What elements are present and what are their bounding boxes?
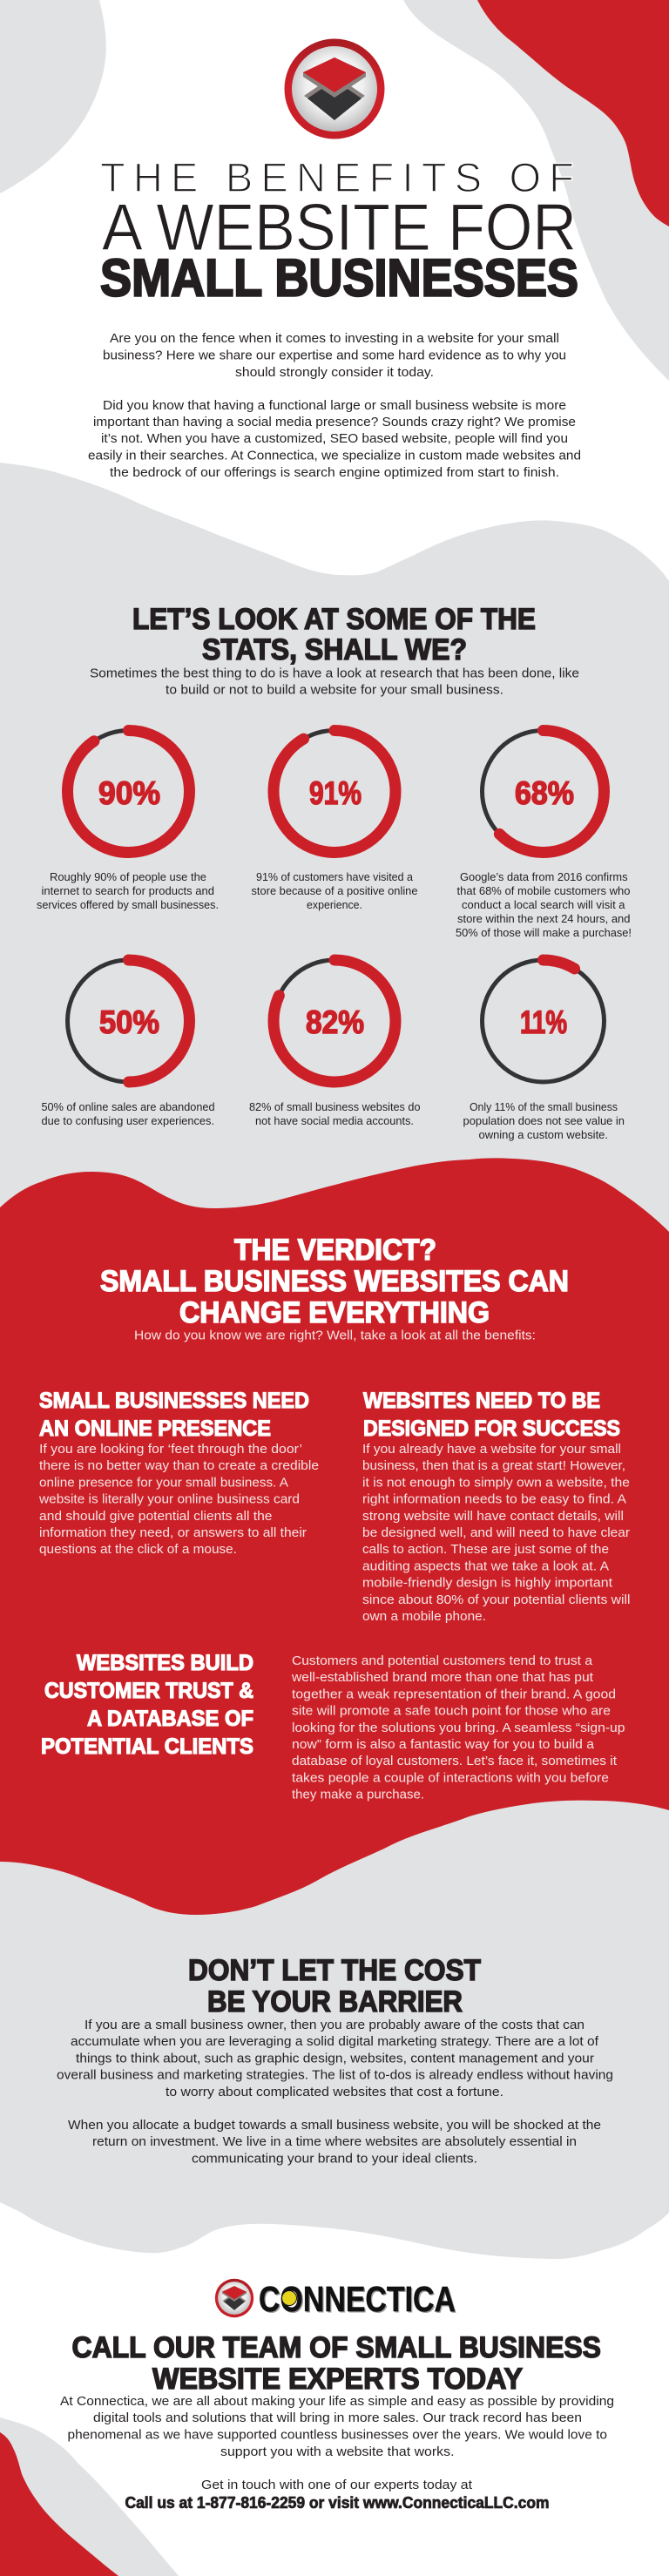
benefit heading: customer trust: A DATABASE OF [87, 1707, 253, 1731]
stat: 68%: that 68% of mobile customers who [456, 885, 631, 897]
heading: call to action [71, 2331, 601, 2396]
cost barrier text: accumulate when you are leveraging a solid digital marketing strategy. There are a lot of [71, 2034, 599, 2049]
cost barrier text: return on investment. We live in a time where websites are absolutely essential in [92, 2134, 577, 2149]
intro text: important than having a social media presence? Sounds crazy right? We promise [93, 415, 576, 429]
stat: 90%: Roughly 90% of people use the [50, 871, 206, 883]
intro text: Did you know that having a functional large or small business website is more [103, 398, 566, 413]
stats intro text: to build or not to build a website for your small business. [166, 683, 503, 698]
benefit: designed for success: If you already have a website for your small [362, 1442, 621, 1457]
stat: 68%: 50% of those will make a purchase! [456, 927, 632, 939]
call to action text: Get in touch with one of our experts today at [201, 2478, 473, 2492]
stat: 50%: due to confusing user experiences. [42, 1115, 214, 1127]
stat: 11%: 11% [520, 1004, 567, 1040]
stat: 50%: 50% [99, 1004, 159, 1040]
heading: verdict [100, 1234, 569, 1329]
cost barrier text: communicating your brand to your ideal clients. [192, 2151, 477, 2166]
benefit text: customer trust: Customers and potential customers tend to trust a [292, 1653, 593, 1668]
stat: 68%: Google’s data from 2016 confirms [460, 871, 627, 883]
benefit: online presence: website is literally your online business card [38, 1492, 300, 1507]
cost barrier text [57, 2018, 613, 2166]
call to action text: digital tools and solutions that will bring in more sales. Our track record has been [93, 2410, 582, 2425]
heading: stats [132, 603, 536, 666]
cost barrier text: If you are a small business owner, then you are probably aware of the costs that can [84, 2018, 585, 2032]
stat: 11%: population does not see value in [463, 1115, 625, 1127]
stat: 11%: owning a custom website. [479, 1129, 608, 1141]
stat: 91%: 91% of customers have visited a [256, 871, 413, 883]
benefit text: customer trust: database of loyal customers. Let’s face it, sometimes it [292, 1754, 618, 1768]
benefit: online presence: questions at the click of a mouse. [39, 1542, 237, 1557]
heading: cost barrier: BE YOUR BARRIER [207, 1985, 463, 2018]
heading: verdict: SMALL BUSINESS WEBSITES CAN [100, 1265, 569, 1298]
stat: 91%: 91% [309, 775, 362, 811]
intro text: Are you on the fence when it comes to investing in a website for your small [110, 331, 559, 346]
benefit heading: customer trust [41, 1651, 253, 1759]
stat: 11% [463, 960, 625, 1141]
benefit text: customer trust [291, 1653, 625, 1802]
stat: 50% [42, 960, 215, 1127]
benefit text: customer trust: looking for the solutions you bring. A seamless “sign-up [292, 1721, 625, 1735]
stat: 82%: not have social media accounts. [255, 1115, 414, 1127]
benefit: designed for success [362, 1389, 631, 1624]
heading: cost barrier [188, 1954, 481, 2018]
benefit heading: customer trust: CUSTOMER TRUST & [44, 1679, 253, 1703]
benefit: designed for success: business, then that is a great start! However, [362, 1458, 625, 1473]
call to action text: support you with a website that works. [220, 2444, 455, 2459]
benefit: designed for success: calls to action. These are just some of the [362, 1542, 609, 1557]
benefit: designed for success: DESIGNED FOR SUCCESS [363, 1416, 620, 1441]
benefit: designed for success: strong website will have contact details, will [362, 1509, 624, 1524]
stat: 68%: 68% [515, 775, 574, 811]
benefit text: customer trust: site will promote a safe touch point for those who are [292, 1704, 611, 1719]
contact line: Call us at 1-877-816-2259 or visit www.ConnecticaLLC.com [125, 2494, 549, 2512]
cost barrier text: things to think about, such as graphic design, websites, content management and your [76, 2051, 594, 2066]
benefit heading: customer trust: POTENTIAL CLIENTS [41, 1734, 253, 1759]
benefit: online presence: SMALL BUSINESSES NEED [39, 1389, 309, 1413]
benefit: designed for success: WEBSITES NEED TO BE [363, 1389, 600, 1413]
heading: cost barrier: DON’T LET THE COST [188, 1954, 481, 1987]
benefit: designed for success: own a mobile phone. [362, 1609, 486, 1624]
stat: 68%: conduct a local search will visit a [462, 899, 625, 911]
benefit text: customer trust: together a weak representation of their brand. A good [292, 1687, 616, 1701]
intro text: the bedrock of our offerings is search engine optimized from start to finish. [110, 465, 559, 480]
stats intro text: Sometimes the best thing to do is have a look at research that has been done, like [90, 666, 579, 681]
intro text [88, 331, 581, 480]
heading: verdict: CHANGE EVERYTHING [179, 1296, 490, 1329]
stat: 91% [251, 730, 418, 911]
benefit: online presence [38, 1389, 319, 1557]
benefit: designed for success: since about 80% of your potential clients will [362, 1592, 631, 1607]
benefit: designed for success: be designed well, and will need to have clear [362, 1525, 630, 1540]
stat: 50%: 50% of online sales are abandoned [42, 1101, 215, 1113]
benefit: online presence: information they need, or answers to all their [39, 1525, 307, 1540]
stat: 90% [37, 730, 219, 911]
call to action text [60, 2394, 614, 2492]
stats intro text [90, 666, 579, 698]
red section background [0, 1158, 669, 1915]
benefit: designed for success: mobile-friendly design is highly important [362, 1576, 613, 1591]
background blob: bottom left red [0, 2432, 118, 2576]
benefit text: customer trust: now” form is also a fantastic way for you to build a [292, 1737, 595, 1752]
heading: stats: LET’S LOOK AT SOME OF THE [132, 603, 536, 636]
call to action text: At Connectica, we are all about making your life as simple and easy as possible by providing [60, 2394, 614, 2409]
benefit: designed for success: right information needs to be easy to find. A [362, 1492, 626, 1507]
call to action text: phenomenal as we have supported countless businesses over the years. We would love to [68, 2427, 607, 2443]
heading: call to action: WEBSITE EXPERTS TODAY [152, 2363, 523, 2396]
stat: 68% [456, 730, 632, 939]
title: SMALL BUSINESSES [100, 249, 578, 307]
benefit: online presence: and should give potential clients all the [39, 1509, 272, 1524]
intro text: it’s not. When you have a customized, SEO based website, people will find you [101, 431, 568, 446]
benefit: online presence: If you are looking for ‘feet through the door’ [39, 1442, 302, 1457]
stat: 91%: experience. [307, 899, 362, 911]
stat: 90%: 90% [98, 775, 160, 811]
logo: Connectica wordmark [215, 2279, 456, 2321]
background blob: top left grey [0, 0, 106, 193]
cost barrier text: overall business and marketing strategies. The list of to-dos is already endless without having [57, 2068, 613, 2083]
stat: 11%: Only 11% of the small business [470, 1101, 618, 1113]
intro text: business? Here we share our expertise and some hard evidence as to why you [103, 348, 566, 362]
stat: 82%: 82% of small business websites do [249, 1101, 421, 1113]
benefit: online presence: there is no better way than to create a credible [39, 1458, 319, 1473]
stat: 68%: store within the next 24 hours, and [457, 913, 631, 925]
logo: Connectica wordmark: CONNECTICA [260, 2281, 456, 2321]
title: A WEBSITE FOR [102, 191, 577, 265]
heading: call to action: CALL OUR TEAM OF SMALL BUSINESS [71, 2331, 601, 2364]
benefit: online presence: online presence for your small business. A [39, 1475, 288, 1490]
benefit text: customer trust: well-established brand more than one that has put [291, 1670, 594, 1685]
background blob: bottom left grey [0, 2417, 179, 2576]
benefit: online presence: AN ONLINE PRESENCE [39, 1416, 271, 1441]
grey section background [0, 463, 669, 2259]
heading: verdict: THE VERDICT? [234, 1234, 436, 1267]
benefit: designed for success: it is not enough to simply own a website, the [362, 1475, 630, 1490]
stat: 82%: 82% [306, 1004, 364, 1040]
verdict subheading: How do you know we are right? Well, take a look at all the benefits: [134, 1328, 536, 1343]
cost barrier text: to worry about complicated websites that cost a fortune. [166, 2085, 503, 2099]
benefit: designed for success: auditing aspects that we take a look at. A [362, 1558, 609, 1573]
stat: 82% [249, 960, 421, 1127]
logo: Connectica emblem [284, 38, 385, 139]
cost barrier text: When you allocate a budget towards a small business website, you will be shocked at the [68, 2118, 601, 2133]
background blob: top right red [477, 0, 669, 226]
benefit text: customer trust: takes people a couple of interactions with you before [292, 1770, 609, 1785]
title: THE BENEFITS OF [100, 154, 574, 200]
background blob: top right grey [403, 0, 669, 381]
title [100, 154, 578, 307]
intro text: easily in their searches. At Connectica, we specialize in custom made websites and [88, 448, 581, 463]
stat: 90%: services offered by small businesses. [37, 899, 219, 911]
benefit text: customer trust: they make a purchase. [292, 1788, 424, 1802]
stat: 91%: store because of a positive online [251, 885, 418, 897]
intro text: should strongly consider it today. [235, 365, 434, 380]
benefit heading: customer trust: WEBSITES BUILD [77, 1651, 253, 1675]
stat: 90%: internet to search for products and [42, 885, 214, 897]
logo: Connectica wordmark: CONNECTICA [259, 2279, 456, 2319]
heading: stats: STATS, SHALL WE? [202, 633, 467, 666]
